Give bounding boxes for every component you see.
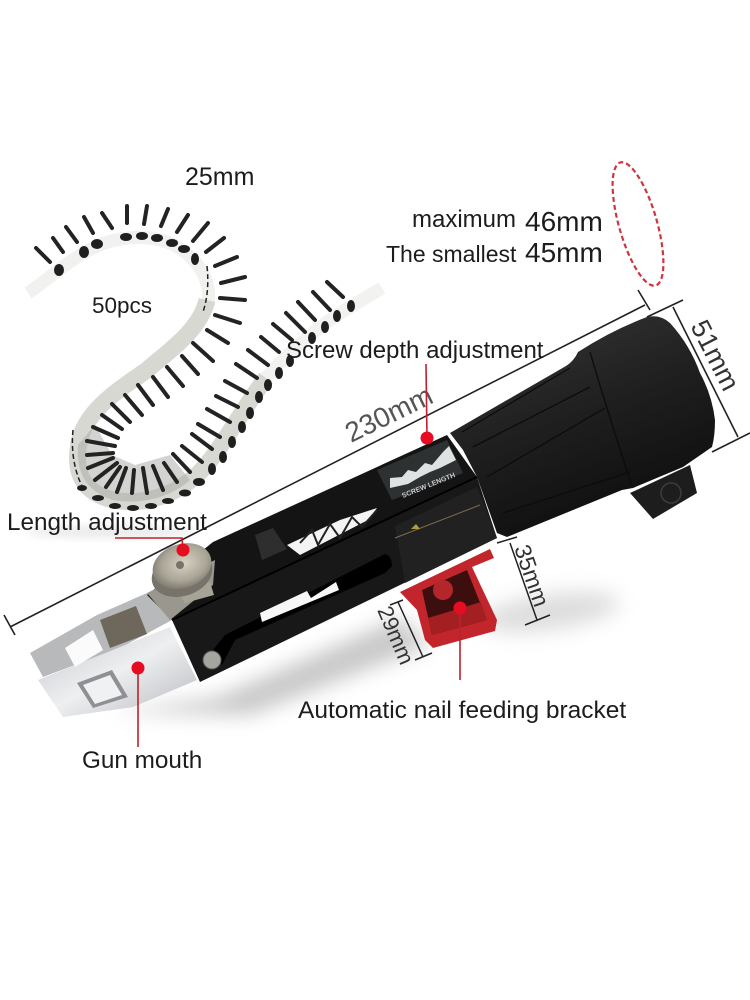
callout: gun mouth pointer <box>132 662 144 747</box>
sleeve ribs <box>462 352 632 513</box>
label: automatic nail feeding bracket: Automatic nail feeding bracket <box>298 697 626 724</box>
label: gun mouth: Gun mouth <box>82 747 202 774</box>
label: the smallest: The smallest <box>386 241 517 267</box>
gun mouth silver nose <box>30 593 197 717</box>
pivot screw <box>203 651 221 669</box>
label: 45mm: 45mm <box>525 237 603 268</box>
dimension: 51mm <box>647 300 750 452</box>
rubber nose cap <box>450 316 715 537</box>
dimension: 29mm: 29mm <box>372 602 419 668</box>
callout: bracket pointer <box>454 602 466 680</box>
mounting block <box>630 465 697 519</box>
ground shadows <box>25 526 622 715</box>
label: 50pcs: 50pcs <box>92 293 152 318</box>
black body plate and rail <box>147 435 497 682</box>
strip band upper <box>28 237 209 305</box>
label: screw depth adjustment: Screw depth adjustment <box>286 337 544 364</box>
red dashed ellipse: bore diameter <box>602 157 674 291</box>
dimension: 230mm: 230mm <box>340 380 438 448</box>
label: maximum: maximum <box>412 206 516 233</box>
dimension: 230mm <box>4 290 650 635</box>
strip band lower loop <box>77 300 266 502</box>
red nail feeding bracket <box>400 549 497 648</box>
label: 25mm: 25mm <box>185 163 254 191</box>
warning label line <box>395 505 480 538</box>
thumb wheel <box>146 536 218 605</box>
screw heads <box>54 232 355 511</box>
screw shafts <box>36 206 343 493</box>
callout: screw depth pointer <box>420 364 434 444</box>
dimension: 51mm: 51mm <box>685 315 745 396</box>
lower window <box>77 670 128 708</box>
strip gray fan <box>78 425 190 502</box>
screw length plate <box>377 440 463 500</box>
callout: length adjustment pointer <box>115 538 190 556</box>
screw length caption: SCREW LENGTH <box>401 472 456 500</box>
dimension: 35mm: 35mm <box>509 541 555 610</box>
dimension: 35mm <box>497 537 555 625</box>
spring opening <box>287 508 377 555</box>
label: length adjustment: Length adjustment <box>7 509 207 536</box>
latch <box>100 606 147 648</box>
upper window <box>65 630 103 667</box>
screw strip <box>28 206 382 511</box>
slot <box>213 554 392 665</box>
label: 46mm: 46mm <box>525 206 603 237</box>
